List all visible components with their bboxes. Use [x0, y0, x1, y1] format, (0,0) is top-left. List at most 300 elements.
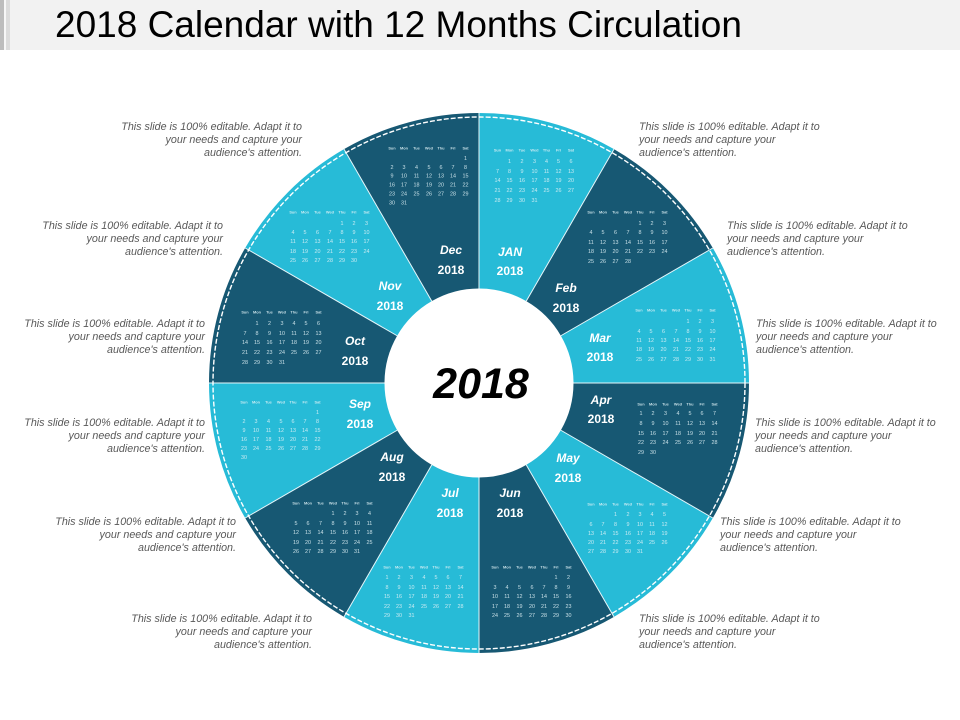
calendar: September: 25 [266, 446, 272, 452]
calendar: December: 29 [462, 192, 468, 198]
calendar: September: 8 [316, 419, 319, 425]
calendar: July: Sun [383, 564, 391, 570]
calendar: August: 19 [293, 540, 299, 546]
calendar: January: 12 [556, 169, 562, 175]
calendar: May: Thu [636, 502, 644, 506]
calendar: June: 30 [566, 613, 572, 619]
month label: August [379, 450, 406, 484]
calendar: June: 17 [492, 604, 498, 610]
calendar: November: 2 [352, 221, 356, 227]
caption: February: This slide is 100% editable. Adapt it to [727, 220, 908, 232]
calendar: January: Sat [568, 148, 575, 152]
calendar: June: 28 [541, 613, 547, 619]
calendar: March: Thu [684, 308, 692, 312]
calendar: October: Sun [241, 310, 249, 314]
calendar: December: Wed [425, 146, 434, 150]
calendar: February: 13 [612, 240, 618, 246]
calendar: January: 5 [557, 159, 560, 165]
calendar: November: 25 [290, 258, 296, 264]
calendar: July: 1 [386, 575, 388, 581]
caption: June: This slide is 100% editable. Adapt it to [639, 613, 820, 625]
month label: June [497, 486, 524, 520]
calendar: March: 1 [686, 319, 690, 325]
month label: September [347, 397, 374, 431]
wedge: June [479, 465, 614, 653]
calendar: September: 30 [241, 455, 247, 461]
calendar: August: 6 [306, 521, 310, 527]
calendar: February: 25 [588, 259, 594, 265]
month panel: May [526, 430, 713, 617]
calendar: June: 6 [530, 585, 534, 591]
caption: May: This slide is 100% editable. Adapt it to [720, 516, 901, 528]
month label: March: 2018 [587, 350, 614, 364]
calendar: May: 25 [649, 540, 655, 546]
calendar: January: 22 [506, 188, 512, 194]
calendar: October: 19 [303, 340, 309, 346]
center year label: 2018 [432, 360, 529, 408]
calendar: June: Thu [540, 564, 548, 570]
calendar: November [289, 210, 370, 264]
calendar: May: 21 [600, 540, 606, 546]
calendar: March: 24 [710, 347, 716, 353]
calendar: July [383, 564, 464, 619]
calendar: July: 4 [422, 575, 426, 581]
calendar: July: 5 [434, 575, 438, 581]
month label: December [438, 243, 465, 277]
calendar: January: Fri [556, 148, 561, 152]
month panel: January [479, 113, 614, 301]
calendar: June: 12 [516, 594, 522, 600]
calendar: November: 21 [327, 249, 333, 255]
calendar: March: Sun [635, 308, 643, 312]
calendar: June: 5 [518, 585, 521, 591]
calendar: January: 2 [520, 159, 524, 165]
wedge: January [479, 113, 614, 301]
calendar: February: 24 [662, 249, 668, 255]
month panel: November [245, 149, 432, 336]
calendar: July: Fri [446, 564, 450, 570]
calendar: January: 10 [532, 169, 538, 175]
calendar: February: 17 [662, 240, 668, 246]
calendar: April: 25 [675, 440, 681, 446]
calendar: January: 29 [506, 198, 512, 204]
calendar: April: 11 [675, 421, 681, 427]
calendar: March: 20 [660, 347, 666, 353]
caption: June: your needs and capture your [638, 626, 776, 638]
calendar: April: 28 [712, 440, 718, 446]
calendar: April: 29 [638, 450, 644, 456]
calendar: June: 2 [567, 575, 570, 581]
calendar: August: 3 [356, 511, 358, 517]
calendar: January: 26 [556, 188, 562, 194]
calendar: August: 5 [294, 521, 298, 527]
caption: April: audience's attention. [755, 443, 853, 455]
calendar: April: 1 [640, 411, 642, 417]
calendar: May: 12 [662, 522, 668, 528]
calendar: December: 21 [450, 182, 456, 188]
calendar: January: 17 [532, 178, 538, 184]
caption: November: audience's attention. [125, 246, 223, 258]
calendar: March: 23 [697, 347, 703, 353]
calendar: November: Wed [326, 210, 335, 214]
calendar: July: 8 [386, 585, 388, 591]
calendar: July: 27 [445, 604, 451, 610]
calendar: July: 24 [408, 604, 414, 610]
caption: January: your needs and capture your [638, 134, 776, 146]
calendar: February: 11 [588, 240, 594, 246]
calendar: December: 17 [401, 182, 407, 188]
calendar: April: 24 [662, 440, 668, 446]
calendar: October: 14 [242, 340, 248, 346]
calendar: October: 24 [279, 350, 285, 356]
calendar: February: Tue [612, 210, 620, 214]
calendar: September: 1 [316, 410, 319, 416]
calendar: March: 11 [636, 338, 642, 344]
calendar: August: 9 [344, 521, 346, 527]
calendar: October: Thu [290, 310, 298, 314]
month label: May: May [556, 451, 581, 465]
calendar: October: 6 [317, 321, 320, 327]
calendar: April: Wed [674, 402, 683, 406]
calendar: September: 5 [280, 419, 282, 425]
month label: April: 2018 [588, 412, 615, 426]
calendar: November: 19 [302, 249, 308, 255]
calendar: October: 28 [242, 360, 248, 366]
calendar: May: 17 [637, 531, 643, 537]
calendar: September: 23 [241, 446, 247, 452]
title: 2018 Calendar with 12 Months Circulation [55, 4, 742, 45]
calendar: March: Mon [647, 308, 656, 312]
month label: June: 2018 [497, 506, 524, 520]
calendar: November: 28 [327, 258, 333, 264]
calendar: July: 18 [421, 594, 427, 600]
calendar: May: 23 [625, 540, 631, 546]
calendar: January: 20 [568, 178, 574, 184]
calendar: March: 4 [638, 329, 640, 335]
calendar: October: 26 [303, 350, 309, 356]
calendar: February: Fri [650, 210, 654, 214]
calendar: February: 4 [590, 230, 592, 236]
calendar: May: 29 [612, 549, 618, 555]
month label: August: Aug [379, 450, 404, 464]
calendar: January: Mon [506, 148, 514, 152]
month label: January: JAN [498, 245, 522, 259]
month label: October: Oct [345, 334, 366, 348]
calendar: November: 9 [352, 230, 356, 236]
calendar: April: 20 [699, 431, 705, 437]
calendar: August [292, 500, 373, 555]
calendar: January: 1 [508, 159, 511, 165]
calendar: October: Mon [253, 310, 262, 314]
calendar: February: 20 [612, 249, 618, 255]
wedge: November [245, 149, 432, 336]
calendar: August: Thu [341, 500, 349, 506]
calendar: June: Sun [491, 564, 499, 570]
calendar: June: 16 [566, 594, 572, 600]
calendar: December: 14 [450, 174, 456, 180]
calendar: November: 27 [314, 258, 320, 264]
month label: July: Jul [441, 486, 459, 500]
calendar: July: 20 [445, 594, 451, 600]
caption: July: your needs and capture your [175, 626, 312, 638]
month panel: June [479, 465, 614, 653]
calendar: November: 26 [302, 258, 308, 264]
calendar: December: Tue [413, 146, 421, 150]
calendar: June: 10 [492, 594, 498, 600]
month panel: September [209, 383, 397, 518]
calendar: May: 11 [649, 522, 655, 528]
calendar: February: Thu [636, 210, 644, 214]
calendar: January [494, 148, 575, 204]
caption: October: audience's attention. [107, 344, 205, 356]
month label: May [555, 451, 582, 485]
calendar: January: 8 [508, 169, 511, 175]
calendar: April: 21 [712, 431, 718, 437]
calendar: July: Thu [432, 564, 440, 570]
calendar: July: 30 [396, 613, 402, 619]
calendar: April: Fri [700, 402, 704, 406]
calendar: August: 17 [354, 530, 360, 536]
calendar: January: 28 [494, 198, 500, 204]
calendar: December: 10 [401, 174, 407, 180]
caption: April: This slide is 100% editable. Adapt it to [755, 417, 936, 429]
calendar: October: 8 [256, 331, 258, 337]
calendar: May: 6 [590, 522, 592, 528]
calendar: October: Sat [315, 310, 322, 314]
caption: August: This slide is 100% editable. Adapt it to [55, 516, 236, 528]
calendar: February: 8 [638, 230, 642, 236]
calendar: February: 10 [662, 230, 668, 236]
month label: March [587, 331, 614, 364]
caption: May: audience's attention. [720, 542, 818, 554]
wedge: July [344, 465, 479, 653]
calendar: October: 31 [279, 360, 285, 366]
calendar: August: 22 [330, 540, 336, 546]
calendar: December: 9 [390, 174, 394, 180]
calendar: December: 6 [440, 165, 442, 171]
calendar: July: 23 [396, 604, 402, 610]
calendar: September: 7 [304, 419, 306, 425]
calendar: March: 18 [636, 347, 642, 353]
calendar: February: 22 [637, 249, 643, 255]
calendar: August: Fri [355, 500, 359, 506]
calendar: August: 24 [354, 540, 360, 546]
calendar: November: 3 [365, 221, 368, 227]
calendar: July: 7 [459, 575, 462, 581]
calendar: February: 9 [650, 230, 654, 236]
calendar: June: 18 [504, 604, 510, 610]
calendar: July: 3 [410, 575, 413, 581]
month label: December: 2018 [438, 263, 465, 277]
calendar: April: 22 [638, 440, 644, 446]
calendar: July: 26 [433, 604, 439, 610]
calendar: December: 1 [464, 156, 467, 162]
calendar: June: 1 [554, 575, 558, 581]
calendar: February: 23 [649, 249, 655, 255]
calendar: January: 24 [532, 188, 538, 194]
calendar: June: Wed [528, 564, 537, 570]
calendar: August: 20 [305, 540, 311, 546]
calendar: June: 8 [554, 585, 558, 591]
calendar: December: 12 [426, 174, 432, 180]
calendar: December: Sun [388, 146, 396, 150]
month label: December: Dec [440, 243, 462, 257]
calendar: April: 3 [664, 411, 667, 417]
calendar: November: 10 [364, 230, 370, 236]
calendar: November: 18 [290, 249, 296, 255]
calendar: July: Sat [457, 564, 464, 570]
calendar: June: Mon [503, 564, 512, 570]
calendar: October: 3 [280, 321, 284, 327]
calendar: October: Fri [304, 310, 308, 314]
calendar: February [587, 210, 668, 265]
calendar: August: 14 [318, 530, 324, 536]
calendar: July: 31 [408, 613, 414, 619]
calendar: May: 28 [600, 549, 606, 555]
calendar: February: 12 [600, 240, 606, 246]
calendar: April: 14 [712, 421, 718, 427]
wedge: December [344, 113, 479, 301]
calendar: January: 31 [532, 198, 538, 204]
calendar: December: 19 [426, 182, 432, 188]
calendar: August: 4 [368, 511, 371, 517]
calendar: March: Fri [698, 308, 702, 312]
calendar: March: 17 [710, 338, 716, 344]
calendar: November: 15 [339, 239, 345, 245]
calendar: May: Tue [612, 502, 620, 506]
calendar: May: 1 [614, 512, 617, 518]
calendar: October: 25 [291, 350, 297, 356]
calendar: May: Mon [599, 502, 608, 506]
calendar: February: 6 [614, 230, 617, 236]
calendar: September: 11 [266, 428, 271, 434]
caption: January: This slide is 100% editable. Adapt it to [639, 121, 820, 133]
calendar: May: 8 [614, 522, 617, 528]
calendar: November: 7 [328, 230, 332, 236]
calendar: April: Sun [637, 402, 645, 406]
calendar: April: 13 [699, 421, 705, 427]
calendar: August: 26 [293, 549, 299, 555]
calendar: March [635, 308, 716, 363]
calendar: March: 19 [648, 347, 654, 353]
calendar: May: Sun [587, 502, 595, 506]
calendar: September: 24 [253, 446, 259, 452]
calendar: July: 22 [384, 604, 390, 610]
calendar: January: 25 [544, 188, 550, 194]
calendar: July: 9 [398, 585, 400, 591]
calendar: August: 11 [367, 521, 372, 527]
calendar: March: 2 [698, 319, 702, 325]
wedge: August [245, 430, 432, 617]
calendar: June: 15 [553, 594, 559, 600]
caption: August: your needs and capture your [99, 529, 236, 541]
calendar: May: Fri [650, 502, 654, 506]
calendar: May: 7 [602, 522, 604, 528]
calendar: May: 24 [637, 540, 643, 546]
calendar: March: 10 [710, 329, 716, 335]
calendar: April: Sat [711, 402, 718, 406]
calendar: August: 7 [319, 521, 322, 527]
calendar: April: 26 [687, 440, 693, 446]
calendar: May: 9 [626, 522, 630, 528]
calendar: February: 2 [650, 221, 654, 227]
calendar: November: 1 [340, 221, 344, 227]
calendar: October: 1 [256, 321, 258, 327]
calendar: February: 21 [625, 249, 631, 255]
calendar: November: 17 [364, 239, 370, 245]
calendar: January: 3 [533, 159, 536, 165]
calendar: October: 30 [266, 360, 272, 366]
calendar: October: 15 [254, 340, 260, 346]
calendar: July: 16 [396, 594, 402, 600]
calendar: November: 23 [351, 249, 357, 255]
month panel: December [344, 113, 479, 301]
calendar: May: 27 [588, 549, 594, 555]
caption: March: This slide is 100% editable. Adapt it to [756, 318, 937, 330]
calendar: August: 10 [354, 521, 360, 527]
calendar: January: 9 [520, 169, 524, 175]
calendar: March: 25 [636, 357, 642, 363]
calendar: January: 14 [494, 178, 500, 184]
calendar: May: 13 [588, 531, 594, 537]
calendar: October: 18 [291, 340, 297, 346]
calendar: June: 24 [492, 613, 498, 619]
calendar: August: Wed [329, 500, 338, 506]
month panel: August [245, 430, 432, 617]
calendar: February: 5 [602, 230, 604, 236]
caption: July: This slide is 100% editable. Adapt it to [131, 613, 312, 625]
month label: April [588, 393, 615, 426]
month label: September: 2018 [347, 417, 374, 431]
calendar: November: 5 [304, 230, 306, 236]
calendar: December: 23 [389, 192, 395, 198]
calendar: May: 16 [625, 531, 631, 537]
calendar: September: Sun [240, 400, 248, 404]
calendar: January: 27 [568, 188, 574, 194]
calendar: April [637, 402, 718, 456]
caption: March: audience's attention. [756, 344, 854, 356]
calendar: September [240, 400, 321, 461]
calendar: September: 26 [278, 446, 284, 452]
month panel: October [209, 248, 397, 383]
calendar: April: Thu [686, 402, 694, 406]
calendar: October: 13 [316, 331, 322, 337]
calendar: October: 23 [266, 350, 272, 356]
calendar: December: 8 [464, 165, 467, 171]
calendar: April: 4 [676, 411, 680, 417]
calendar: January: 18 [544, 178, 550, 184]
calendar: January: Wed [530, 148, 539, 152]
calendar: May: 18 [649, 531, 655, 537]
calendar: November: 20 [314, 249, 320, 255]
caption: August: audience's attention. [138, 542, 236, 554]
calendar: December: 2 [390, 165, 394, 171]
calendar: September: 28 [302, 446, 308, 452]
calendar: May: 22 [612, 540, 618, 546]
month panel: February [526, 149, 713, 336]
calendar: September: 3 [254, 419, 258, 425]
calendar: October: Wed [278, 310, 287, 314]
calendar: December: 13 [438, 174, 444, 180]
calendar: May: 20 [588, 540, 594, 546]
calendar: October: 9 [268, 331, 271, 337]
calendar: August: 21 [318, 540, 324, 546]
calendar: March: 9 [698, 329, 702, 335]
caption: December: your needs and capture your [165, 134, 302, 146]
calendar: February: Wed [624, 210, 633, 214]
calendar: August: 23 [342, 540, 348, 546]
calendar: September: 17 [253, 437, 259, 443]
